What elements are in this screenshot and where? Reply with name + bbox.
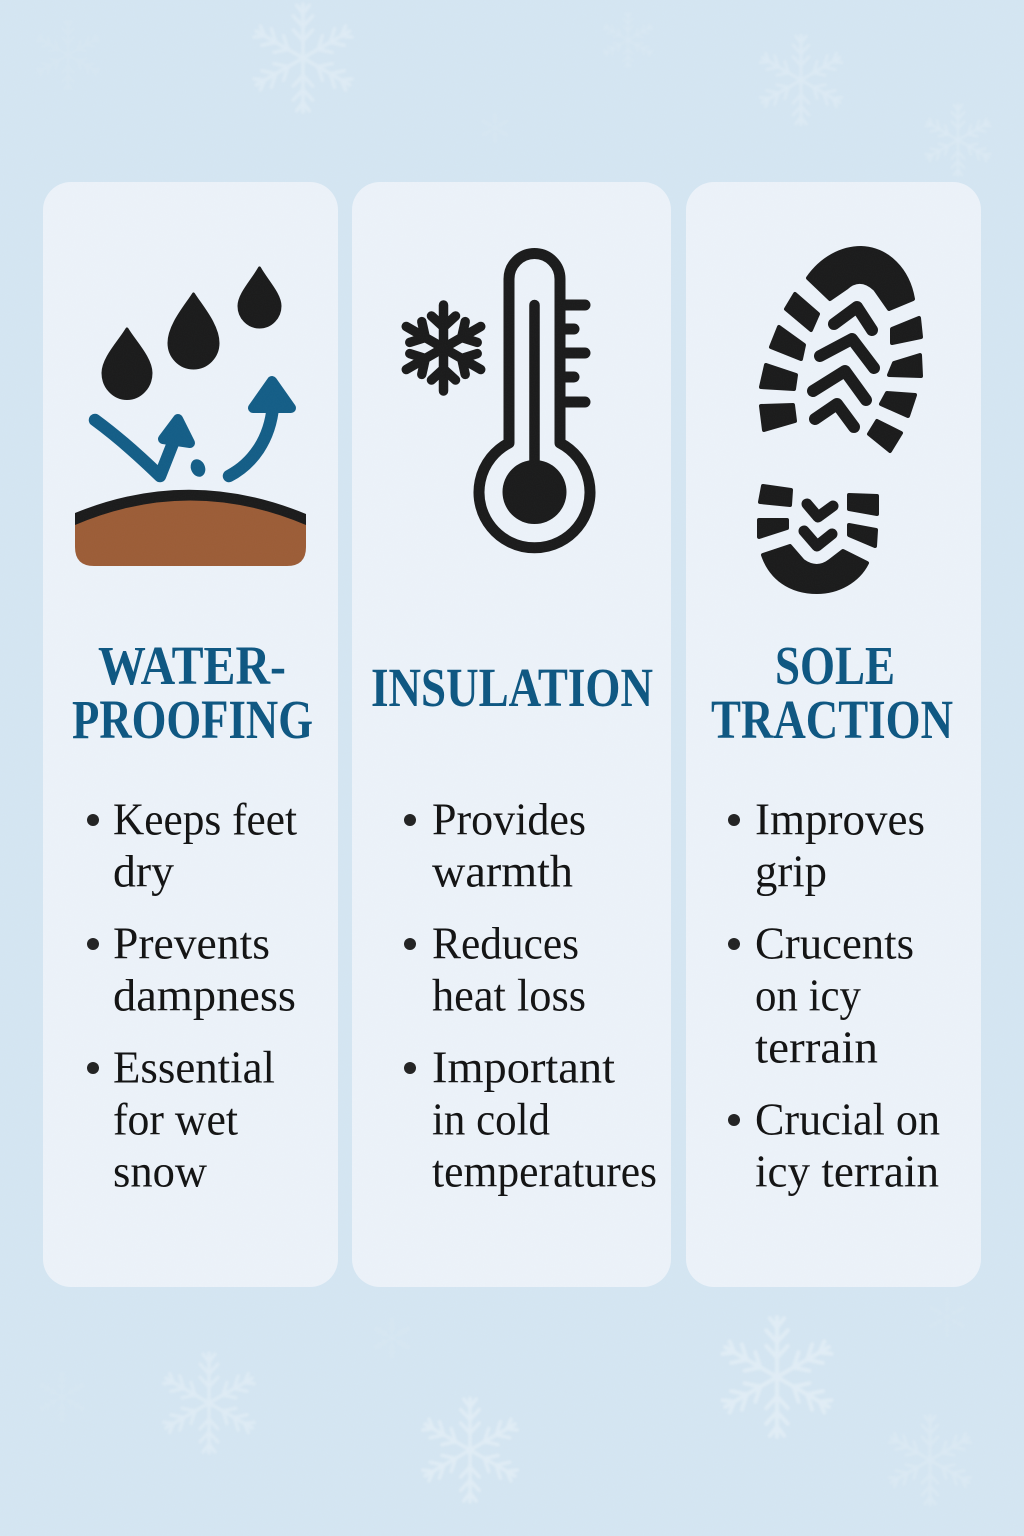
heading: insulation: INSULATION bbox=[371, 657, 653, 718]
list: waterproofing benefits bbox=[87, 794, 297, 1196]
list: waterproofing benefits: for wet bbox=[113, 1094, 238, 1144]
list: sole traction benefits bbox=[728, 794, 940, 1196]
list: waterproofing benefits: dampness bbox=[113, 970, 296, 1020]
heading: sole traction: SOLE bbox=[775, 635, 895, 696]
panel: sole traction bbox=[686, 182, 981, 1287]
list: insulation benefits: heat loss bbox=[432, 970, 586, 1020]
list: insulation benefits bbox=[404, 794, 657, 1196]
list: waterproofing benefits: Keeps feet bbox=[113, 794, 297, 844]
panel: waterproofing bbox=[43, 182, 338, 1287]
heading: waterproofing: PROOFING bbox=[72, 689, 313, 750]
heel tread bbox=[759, 486, 877, 592]
list: insulation benefits: Important bbox=[432, 1042, 616, 1092]
list: sole traction benefits: Improves bbox=[755, 794, 925, 844]
list: insulation benefits: warmth bbox=[432, 846, 573, 896]
panel: insulation bbox=[352, 182, 671, 1287]
forefoot tread bbox=[761, 248, 921, 451]
list: sole traction benefits: Crucial on bbox=[755, 1094, 940, 1144]
list: insulation benefits: Provides bbox=[432, 794, 586, 844]
icon: thermometer bbox=[479, 254, 590, 548]
list: sole traction benefits: Crucents bbox=[755, 918, 914, 968]
heading: sole traction: TRACTION bbox=[711, 689, 953, 750]
heading: waterproofing: WATER- bbox=[98, 635, 286, 696]
icon: boot sole print bbox=[759, 248, 921, 592]
list: sole traction benefits: icy terrain bbox=[755, 1146, 939, 1196]
list: sole traction benefits: on icy bbox=[755, 970, 861, 1020]
list: waterproofing benefits: dry bbox=[113, 846, 174, 896]
list: sole traction benefits: terrain bbox=[755, 1022, 878, 1072]
icon: water drops bouncing off a membrane bbox=[75, 268, 306, 566]
list: waterproofing benefits: snow bbox=[113, 1146, 207, 1196]
icon: snowflake bbox=[400, 305, 487, 391]
heading: sole traction bbox=[711, 635, 953, 750]
list: sole traction benefits: grip bbox=[755, 846, 827, 896]
list: insulation benefits: in cold bbox=[432, 1094, 550, 1144]
heading: waterproofing bbox=[72, 635, 313, 750]
list: waterproofing benefits: Essential bbox=[113, 1042, 275, 1092]
list: waterproofing benefits: Prevents bbox=[113, 918, 270, 968]
list: insulation benefits: Reduces bbox=[432, 918, 579, 968]
list: insulation benefits: temperatures bbox=[432, 1146, 657, 1196]
